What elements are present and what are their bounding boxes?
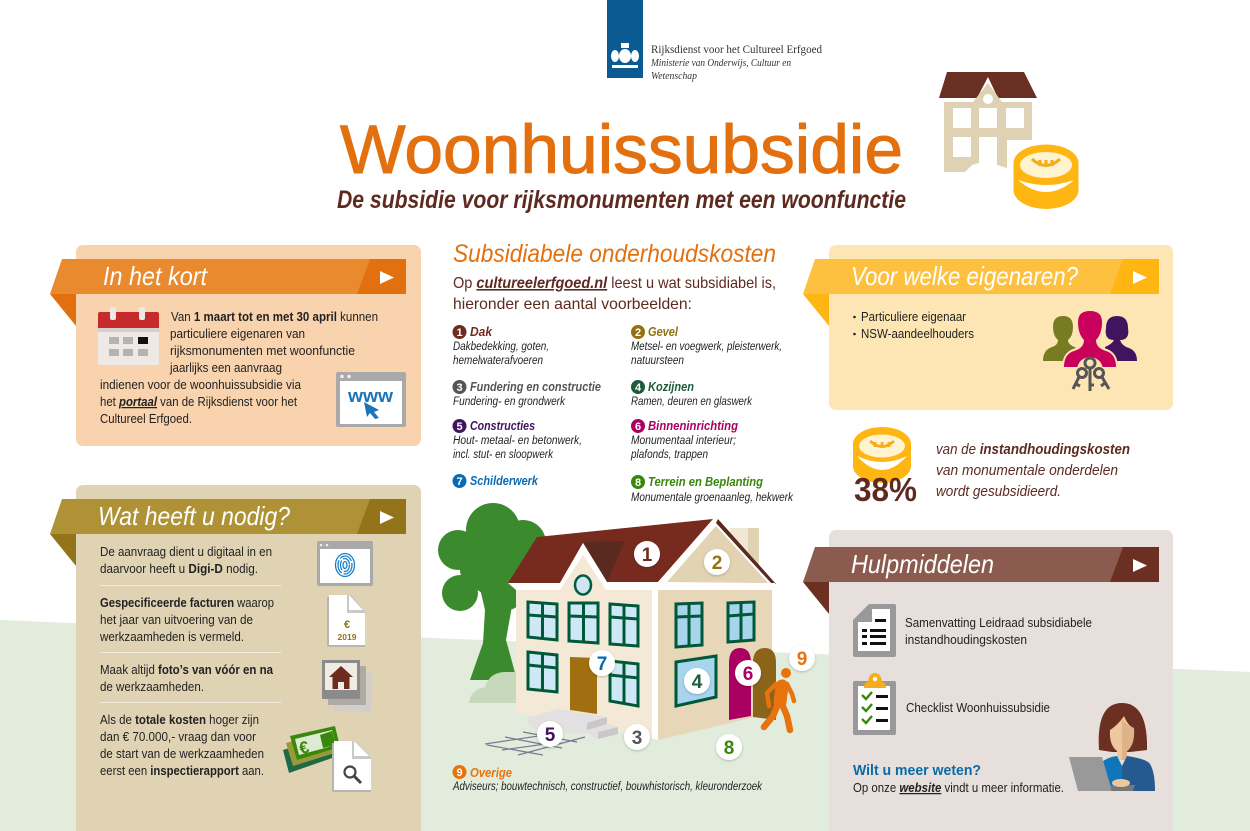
white corner xyxy=(652,590,658,740)
subtitle: De subsidie voor rijksmonumenten met een woonfunctie xyxy=(337,186,906,214)
item 3 Fundering: 3 xyxy=(456,382,463,394)
text: needs list: de werkzaamheden. xyxy=(100,680,204,694)
banner: In het kort: In het kort xyxy=(103,261,209,291)
icon: owners with keys xyxy=(1043,310,1137,391)
panel: Hulpmiddelen xyxy=(803,530,1173,831)
item 1 Dak xyxy=(452,325,549,367)
item 6 Binneninrichting: 6 xyxy=(635,421,641,433)
item 8 Terrein en Beplanting: Monumentale groenaanleg, hekwerk xyxy=(631,492,794,504)
brown door xyxy=(753,648,776,720)
item 2 Gevel: Gevel xyxy=(648,325,678,339)
text: more info: Op onze website vindt u meer informatie. xyxy=(853,781,1064,795)
item 3 Fundering: Fundering en constructie xyxy=(470,380,601,394)
icon: house with coins xyxy=(939,72,1078,209)
item 4 Kozijnen xyxy=(631,380,753,408)
text: subsidy percentage: wordt gesubsidieerd. xyxy=(936,484,1061,500)
item 1 Dak: Dak xyxy=(470,325,493,339)
background: green ground xyxy=(0,620,1250,831)
number markers: 9 xyxy=(797,649,807,670)
icon: photos xyxy=(322,660,373,713)
text: In het kort: particuliere eigenaren van xyxy=(170,327,305,341)
text: needs list: Maak altijd foto’s van vóór en na xyxy=(100,663,274,677)
item 7 Schilderwerk: 7 xyxy=(456,476,463,488)
text: subsidy percentage: van monumentale onderdelen xyxy=(936,463,1118,479)
item 2 Gevel: natuursteen xyxy=(631,355,684,367)
text: needs list: Gespecificeerde facturen waarop xyxy=(100,596,274,610)
text: needs list: Als de totale kosten hoger zijn xyxy=(100,713,259,727)
banner: In het kort xyxy=(50,259,406,326)
text: owners list xyxy=(853,310,974,341)
dormer shadow xyxy=(583,541,625,582)
text: In het kort: rijksmonumenten met woonfunctie xyxy=(170,344,355,358)
number markers: 4 xyxy=(692,672,703,693)
number markers: 2 xyxy=(712,553,722,574)
banner: Voor welke eigenaren? xyxy=(803,259,1159,326)
icon: coins xyxy=(853,427,911,483)
item 2 Gevel xyxy=(631,325,782,367)
item 3 Fundering xyxy=(452,380,601,408)
item 2 Gevel: 2 xyxy=(635,327,641,339)
text: more info: Wilt u meer weten? xyxy=(853,762,981,779)
item 6 Binneninrichting: Monumentaal interieur; xyxy=(631,435,736,447)
banner: Wat heeft u nodig?: Wat heeft u nodig? xyxy=(98,501,290,531)
icon: calendar xyxy=(98,307,159,365)
illustration: house xyxy=(485,517,815,760)
text: owners list: Particuliere eigenaar xyxy=(861,310,966,324)
intro text xyxy=(453,275,776,313)
text: subsidy percentage xyxy=(936,442,1130,500)
intro text: Op cultureelerfgoed.nl leest u wat subsidiabel is, xyxy=(453,275,776,292)
main roof xyxy=(508,519,713,583)
illustration: bush xyxy=(469,672,520,703)
number markers: 5 xyxy=(545,725,556,746)
text: needs list: eerst een inspectierapport aan. xyxy=(100,764,264,778)
intro text: hieronder een aantal voorbeelden: xyxy=(453,296,692,313)
icon: invoice 2019: € xyxy=(344,619,350,631)
list: subsidiable items xyxy=(452,325,794,504)
text: more info xyxy=(853,762,1064,795)
item 4 Kozijnen: Kozijnen xyxy=(648,380,694,394)
logo: Rijksoverheid: Ministerie van Onderwijs, Cultuur en xyxy=(650,57,791,69)
item 6 Binneninrichting: plafonds, trappen xyxy=(630,449,708,461)
right gable xyxy=(658,517,776,584)
item 5 Constructies: Constructies xyxy=(470,419,535,433)
number markers xyxy=(537,541,815,760)
icon: woman with laptop xyxy=(1069,703,1155,791)
item 9 Overige: 9 xyxy=(456,767,463,779)
number markers: 8 xyxy=(724,738,734,759)
item 1 Dak: 1 xyxy=(456,327,463,339)
front door xyxy=(570,657,597,714)
item 1 Dak: Dakbedekking, goten, xyxy=(453,341,549,353)
text: checklist link: Checklist Woonhuissubsidie xyxy=(906,701,1050,715)
illustration: tree xyxy=(438,503,546,680)
text: needs list xyxy=(99,545,281,778)
text: needs list: de start van de werkzaamheden xyxy=(100,747,264,761)
item 8 Terrein en Beplanting xyxy=(631,475,794,504)
number markers: 7 xyxy=(597,654,607,675)
title: Woonhuissubsidie xyxy=(340,111,903,188)
chimney xyxy=(730,528,759,570)
text: In het kort: indienen voor de woonhuissubsidie via xyxy=(100,378,301,392)
text: In het kort xyxy=(100,310,378,426)
text: In het kort: Cultureel Erfgoed. xyxy=(100,412,192,426)
item 8 Terrein en Beplanting: Terrein en Beplanting xyxy=(648,475,763,489)
icon: document summary xyxy=(853,604,896,657)
logo: Rijksoverheid xyxy=(607,0,822,82)
logo: Rijksoverheid: Rijksdienst voor het Cultureel Erfgoed xyxy=(651,44,822,56)
stat: 38%: 38% xyxy=(854,471,917,508)
icon: money and report: € xyxy=(297,737,312,758)
heading: Subsidiabele onderhoudskosten: Subsidiabele onderhoudskosten xyxy=(453,240,776,268)
paving grid xyxy=(485,732,585,755)
banner: Hulpmiddelen: Hulpmiddelen xyxy=(851,549,994,579)
white eave xyxy=(508,583,560,590)
text: needs list: daarvoor heeft u Digi-D nodig. xyxy=(100,562,258,576)
icon: fingerprint browser xyxy=(317,541,373,586)
logo: Rijksoverheid: Wetenschap xyxy=(651,70,697,82)
icon: invoice 2019 xyxy=(327,595,365,647)
text: In het kort: jaarlijks een aanvraag xyxy=(169,361,282,375)
item 3 Fundering: Fundering- en grondwerk xyxy=(453,396,566,408)
text: needs list: werkzaamheden is vermeld. xyxy=(99,630,244,644)
icon: www browser: www xyxy=(347,386,394,406)
item 9 Overige xyxy=(452,765,763,793)
text: In het kort: het portaal van de Rijksdienst voor het xyxy=(100,395,297,409)
item 5 Constructies: Hout- metaal- en betonwerk, xyxy=(453,435,582,447)
banner: Voor welke eigenaren?: Voor welke eigenaren? xyxy=(851,261,1078,291)
right facade xyxy=(658,590,772,740)
banner: Hulpmiddelen xyxy=(803,547,1159,614)
text: summary link: Samenvatting Leidraad subsidiabele xyxy=(905,616,1092,630)
banner: Wat heeft u nodig? xyxy=(50,499,406,566)
item 9 Overige: Overige xyxy=(470,766,512,780)
number markers: 1 xyxy=(642,545,653,566)
number markers: 3 xyxy=(632,728,642,749)
item 4 Kozijnen: Ramen, deuren en glaswerk xyxy=(631,396,753,408)
text: subsidy percentage: van de instandhoudingskosten xyxy=(936,442,1130,458)
text: needs list: dan € 70.000,- vraag dan voor xyxy=(100,730,256,744)
item 6 Binneninrichting xyxy=(630,419,738,461)
magenta door xyxy=(729,648,751,720)
icon: money and report xyxy=(283,726,371,792)
text: needs list: De aanvraag dient u digitaal in en xyxy=(100,545,272,559)
item 7 Schilderwerk: Schilderwerk xyxy=(470,474,539,488)
item 5 Constructies: 5 xyxy=(456,421,463,433)
icon: www browser xyxy=(336,372,406,427)
item 6 Binneninrichting: Binneninrichting xyxy=(648,419,738,433)
item 1 Dak: hemelwaterafvoeren xyxy=(453,355,543,367)
item 8 Terrein en Beplanting: 8 xyxy=(635,477,641,489)
person xyxy=(764,668,794,730)
text: In het kort: Van 1 maart tot en met 30 april kunnen xyxy=(171,310,378,324)
item 5 Constructies xyxy=(452,419,582,461)
item 2 Gevel: Metsel- en voegwerk, pleisterwerk, xyxy=(631,341,782,353)
steps xyxy=(528,709,618,739)
text: needs list: het jaar van uitvoering van de xyxy=(100,613,253,627)
panel: In het kort xyxy=(50,245,421,446)
icon: checklist xyxy=(853,673,896,735)
number markers: 6 xyxy=(743,664,753,685)
item 9 Overige: Adviseurs; bouwtechnisch, constructief, bouwhistorisch, kleuronderzoek xyxy=(452,781,763,793)
text: summary link xyxy=(905,616,1092,647)
item 4 Kozijnen: 4 xyxy=(635,382,642,394)
text: summary link: instandhoudingskosten xyxy=(905,633,1027,647)
item 5 Constructies: incl. stut- en sloopwerk xyxy=(453,449,554,461)
icon: invoice 2019: 2019 xyxy=(338,632,357,642)
front gable xyxy=(554,543,612,590)
windows xyxy=(528,602,754,706)
left facade xyxy=(516,590,652,738)
panel: Voor welke eigenaren? xyxy=(803,245,1173,410)
text: owners list: NSW-aandeelhouders xyxy=(861,327,974,341)
panel: Wat heeft u nodig? xyxy=(50,485,421,831)
